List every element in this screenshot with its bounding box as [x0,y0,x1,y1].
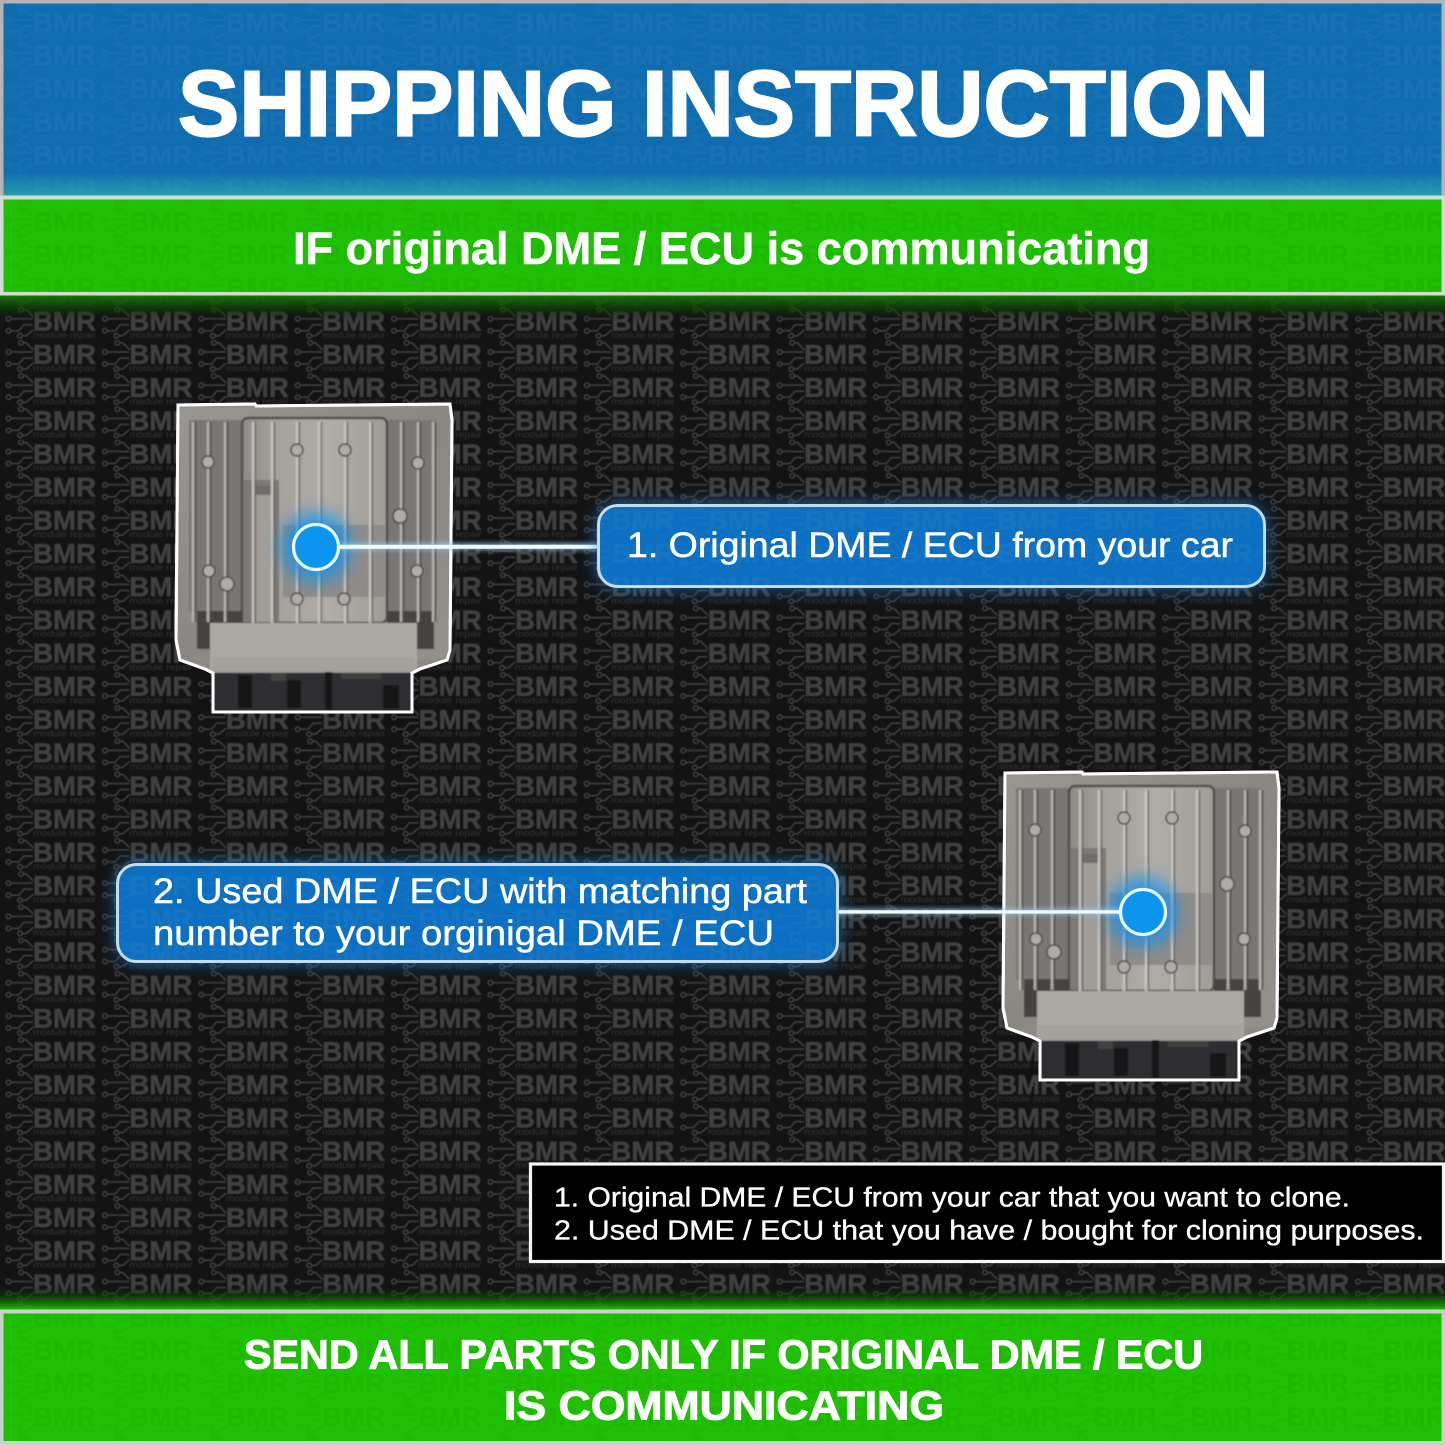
callout 1 text: 1. Original DME / ECU from your car [627,526,1233,565]
panel: footer band [0,1310,1445,1445]
callout: step 2 [117,864,838,962]
title: SHIPPING INSTRUCTION [178,52,1269,156]
panel: header band [0,0,1445,196]
icon: used ECU module [1003,772,1279,1080]
icon: connector line 2 [838,908,1120,915]
legend box [530,1164,1444,1262]
callout 2 text [153,872,807,953]
legend text [554,1182,1424,1246]
callout 2 text: 2. Used DME / ECU with matching part [153,872,807,911]
panel: ECU 2 [838,772,1279,1080]
icon: blue marker [1120,890,1166,934]
legend text: 2. Used DME / ECU that you have / bought for cloning purposes. [554,1214,1424,1246]
footer text: SEND ALL PARTS ONLY IF ORIGINAL DME / ECU [244,1332,1203,1378]
icon: blue marker glow [1110,879,1176,945]
green glow above footer [0,1286,1445,1310]
panel: ECU 1 [176,404,598,712]
callout: step 1 [598,505,1265,587]
icon: connector line 1 [340,543,598,550]
green glow under subheader [0,296,1445,320]
icon: original ECU module [176,404,452,712]
callout 2 text: number to your orginigal DME / ECU [153,914,774,953]
panel: green subheader band [0,196,1445,296]
footer text: IS COMMUNICATING [504,1382,944,1428]
footer text [244,1332,1203,1428]
icon: blue marker glow [283,514,349,580]
legend text: 1. Original DME / ECU from your car that you want to clone. [554,1182,1350,1212]
subheading: IF original DME / ECU is communicating [293,223,1150,274]
icon: blue marker [294,524,338,570]
